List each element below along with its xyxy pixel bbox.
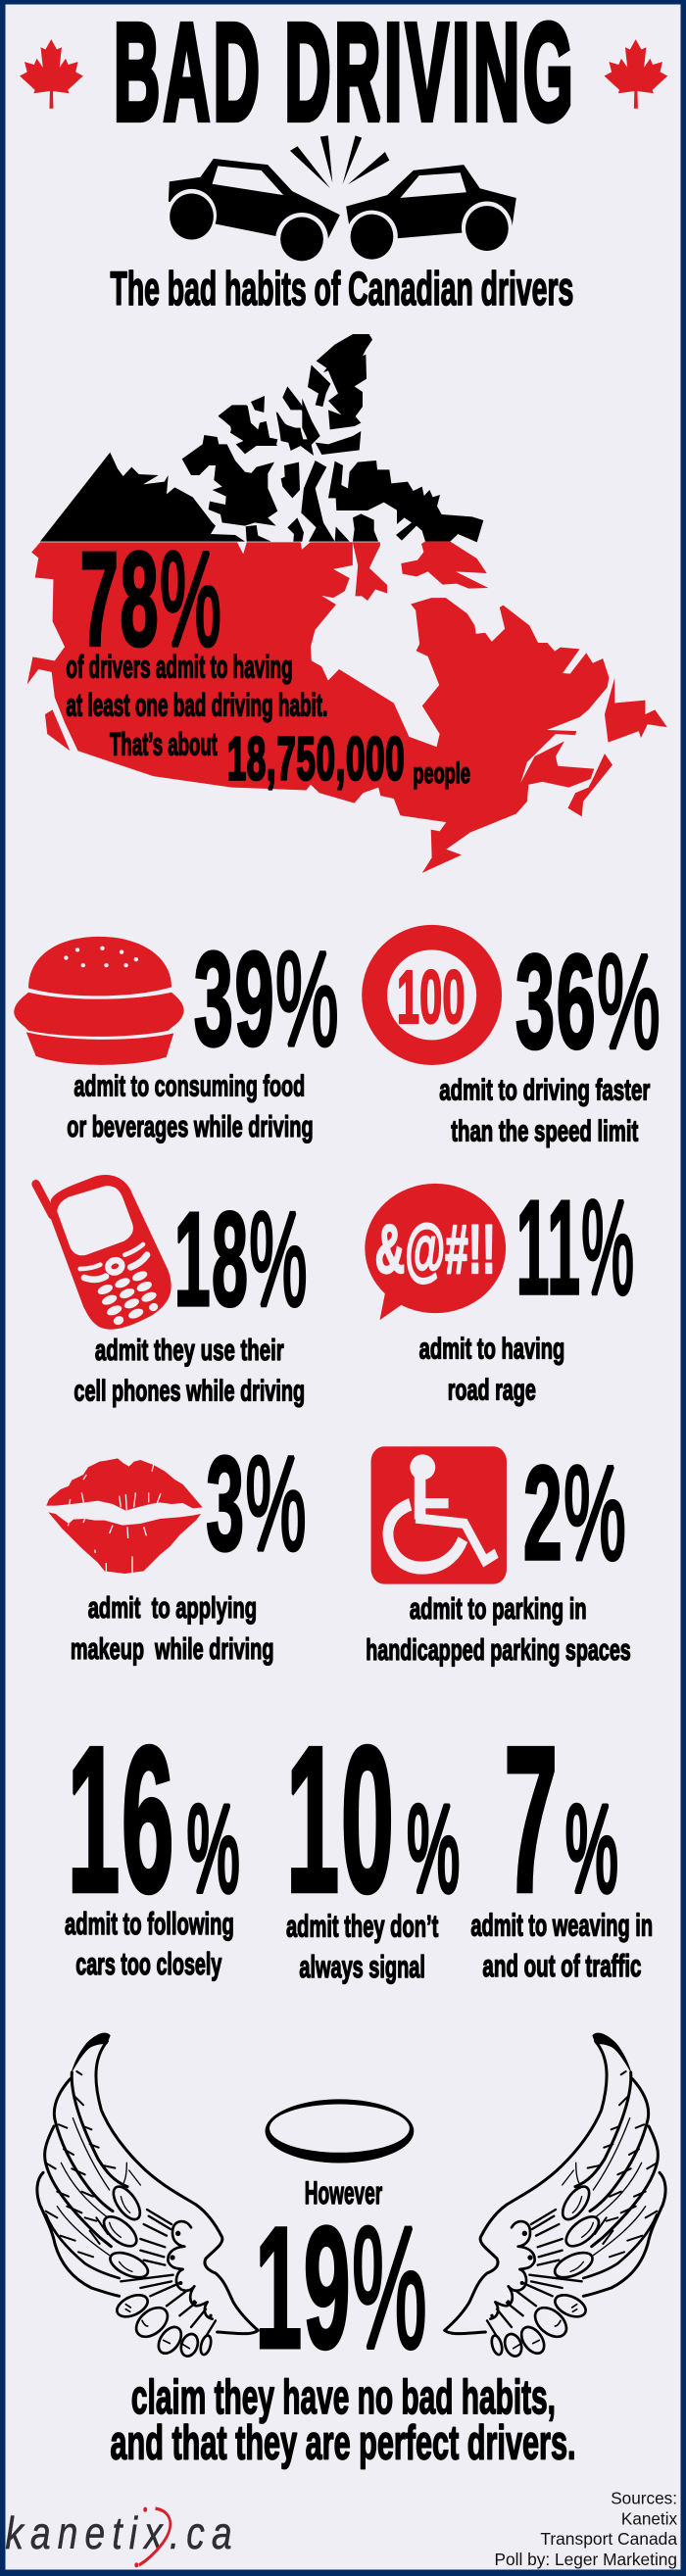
text: following caption: admit to following [65,1908,234,1942]
text: parking caption [366,1592,631,1667]
icon: handicapped sign [371,1446,507,1584]
text: sources: Sources: [611,2490,677,2508]
icon: crashing cars [167,135,516,266]
text: claim caption: claim they have no bad habits, [131,2371,556,2424]
text: sources [494,2490,677,2569]
text: that's about: That’s about [110,727,218,762]
text: phone caption [74,1334,305,1407]
icon: speed limit sign [362,925,502,1065]
stat: 18,750,000: 18,750,000 [227,725,405,793]
text: at least one: at least one bad driving habit. [66,689,327,723]
stat: 10%: 10 [286,1704,396,1935]
panel: header [20,0,667,316]
stat: 16%: 16 [68,1704,175,1935]
icon: phone [36,1175,172,1330]
stat: 19%: 19% [255,2190,428,2384]
stat: 3%: 3% [206,1429,308,1579]
logo: kanetix.ca: kanetix.ca [5,2507,232,2558]
icon: right angel wing [445,2033,665,2358]
text: phone caption: cell phones while driving [74,1374,305,1407]
text: road rage caption: admit to having [419,1332,564,1365]
icon: halo [266,2099,414,2163]
stat: 7%: % [565,1781,618,1919]
text: food caption: or beverages while driving [67,1110,314,1143]
icon: speech bubble with swearing: &@#!! [375,1211,496,1288]
stat: 39%: 39% [194,924,340,1074]
text: sources: Poll by: Leger Marketing [494,2551,677,2569]
stat: 10%: % [407,1781,460,1919]
icon: lips [46,1458,203,1574]
text: sources: Transport Canada [540,2531,677,2549]
stat: 78%: 78% [80,523,222,673]
icon: speech bubble with swearing [365,1184,506,1320]
panel: bottom section [5,1704,677,2569]
icon: left maple leaf [20,39,83,109]
panel: six habits [14,924,662,1667]
text: signal caption: always signal [299,1950,425,1985]
text: of drivers: of drivers admit to having [66,651,293,685]
text: weaving caption [470,1909,653,1984]
text: makeup caption: admit to applying [88,1591,257,1624]
text: road rage caption: road rage [448,1373,536,1406]
stat: 7%: 7 [504,1704,558,1935]
text: people: people [413,756,470,790]
text: makeup caption: makeup while driving [71,1632,273,1666]
stat: 2%: 2% [523,1438,627,1588]
stat text over map [66,523,470,793]
text: following caption: cars too closely [75,1948,221,1982]
stat: 11%: 11% [516,1173,635,1323]
text: food caption: admit to consuming food [74,1069,305,1102]
text: signal caption: admit they don’t [286,1910,439,1944]
panel: Canada map [27,334,667,873]
text: following caption [65,1908,234,1982]
stat: 18%: 18% [174,1185,309,1335]
map: northern black part [40,334,483,542]
icon: right maple leaf [605,39,667,109]
icon: speed limit sign: 100 [397,954,466,1040]
text: weaving caption: and out of traffic [482,1949,641,1984]
text: phone caption: admit they use their [95,1334,284,1366]
text: signal caption [286,1910,439,1985]
text: sources: Kanetix [621,2510,677,2529]
icon: burger [14,937,184,1065]
text: food caption [67,1069,314,1143]
icon: left angel wing [37,2033,258,2358]
map: southern red part [27,542,667,873]
stat: 16%: % [187,1781,240,1919]
text: speed caption: than the speed limit [451,1114,638,1147]
text: however: However [305,2175,382,2211]
text: road rage caption [419,1332,564,1406]
text: speed caption [439,1073,651,1147]
text: claim caption [111,2371,576,2470]
text: parking caption: admit to parking in [410,1592,587,1625]
text: makeup caption [71,1591,273,1666]
